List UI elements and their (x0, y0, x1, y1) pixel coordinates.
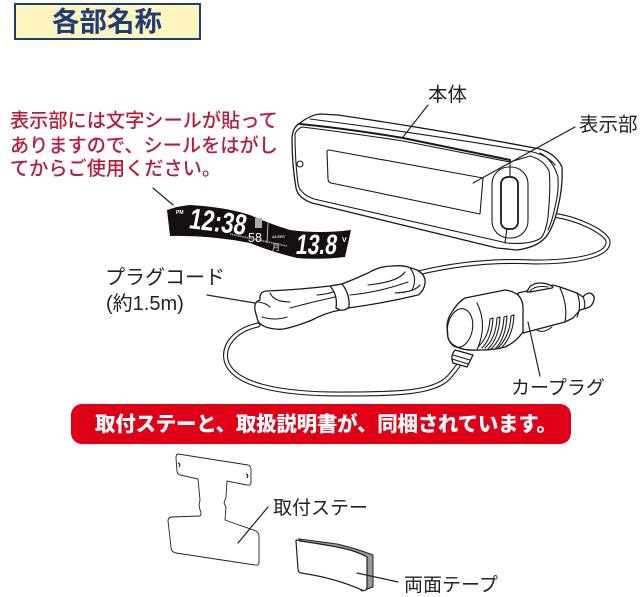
cable from body to plug (226, 215, 608, 394)
display sticker illustration: ALERT (272, 234, 286, 239)
callout: sticker removal note: ありますので、シールをはがし (10, 135, 278, 157)
label: プラグコード: (約1.5m) (106, 292, 184, 315)
plug head (447, 290, 523, 350)
label: 表示部 (473, 114, 638, 183)
callout: sticker removal note (10, 110, 278, 180)
callout: sticker removal note: てからご使用ください。 (10, 158, 221, 180)
label: 両面テープ: 両面テープ (404, 574, 498, 596)
label: プラグコード: プラグコード (105, 266, 225, 289)
display sticker illustration (153, 188, 351, 260)
callout: sticker removal note: 表示部には文字シールが貼って (10, 110, 278, 132)
icon: switch inner pill (501, 177, 518, 229)
label: 取付ステー: 取付ステー (273, 497, 368, 519)
label: 取付ステー (238, 497, 368, 543)
display sticker illustration: 58 (248, 231, 262, 245)
label: 本体 (403, 84, 467, 137)
display window (327, 150, 483, 214)
icon: main body (292, 114, 562, 250)
display sticker illustration: 12:38 (187, 203, 249, 242)
label: 本体: 本体 (428, 84, 467, 106)
label: カープラグ: カープラグ (511, 377, 605, 399)
title: 各部名称: 各部名称 (52, 6, 162, 37)
plug vents (479, 315, 514, 349)
icon: switch outer pill (492, 167, 528, 238)
label: 両面テープ (357, 573, 498, 596)
display sticker illustration: 月 (272, 243, 280, 252)
icon: small hole (297, 161, 303, 167)
label: プラグコード (105, 266, 255, 315)
icon: car plug (444, 283, 594, 367)
banner: included items: 取付ステーと、取扱説明書が、同梱されています。 (95, 412, 557, 436)
label: カープラグ (511, 322, 605, 399)
title: 各部名称 (15, 4, 200, 39)
icon: double-sided tape (296, 539, 373, 591)
icon: mounting stay (168, 454, 259, 565)
label: 表示部: 表示部 (579, 114, 638, 136)
display sticker illustration: 13.8 (294, 229, 339, 260)
display sticker illustration: PM (176, 210, 184, 216)
display sticker illustration: V (342, 237, 347, 244)
knot of cord (255, 266, 425, 329)
plug tube (518, 285, 594, 333)
plug clip (527, 283, 553, 292)
banner: included items (71, 404, 571, 444)
